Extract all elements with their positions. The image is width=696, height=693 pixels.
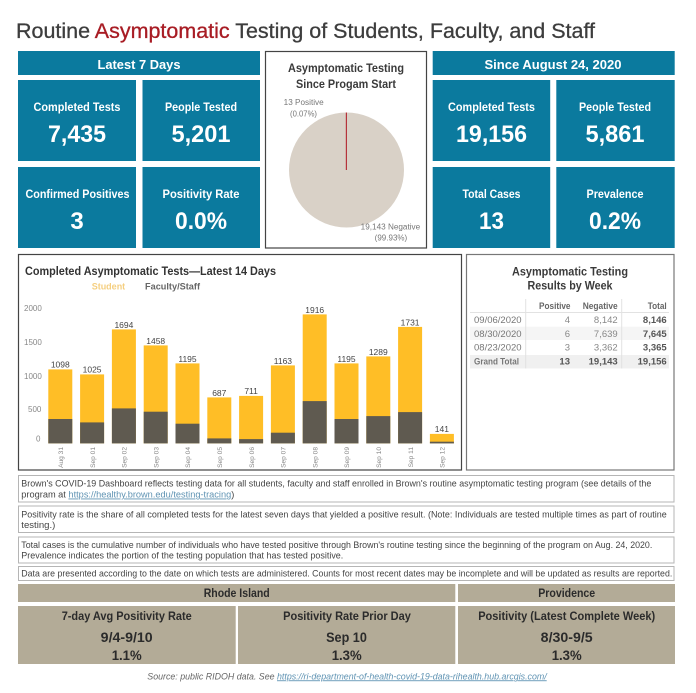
bar: Sep 07: 1163 xyxy=(274,356,292,366)
row: grand total: 19,143 xyxy=(589,356,618,367)
card: 7-day average positivity: 1.1% xyxy=(112,647,142,663)
label: positive: (0.07%) xyxy=(290,110,317,118)
legend: Student xyxy=(92,282,125,292)
label: negative: 19,143 Negative xyxy=(361,222,421,232)
bar: Sep 10: 1289 xyxy=(369,347,388,357)
bar: Aug 31: 1098 xyxy=(51,360,70,370)
bar: Sep 09: Sep 09 xyxy=(344,447,351,468)
y axis: 2000 xyxy=(24,304,42,313)
card: completed tests total: Completed Tests xyxy=(448,100,535,114)
bar: Sep 12 xyxy=(430,424,454,468)
bar: Sep 08 xyxy=(303,305,327,468)
bar: Sep 11: Sep 11 xyxy=(408,447,415,467)
card: prevalence: Prevalence xyxy=(586,187,644,201)
source line: Source: public RIDOH data. See https://ri-department-of-health-covid-19-data-rihealth.hub.arcgis.com/ xyxy=(147,671,548,681)
card: providence positivity: 1.3% xyxy=(552,647,582,663)
header: providence xyxy=(458,584,675,602)
note: total cases and prevalence: Prevalence indicates the portion of the testing population that has tested positive. xyxy=(21,550,343,560)
card: positivity rate prior day: 1.3% xyxy=(332,647,362,663)
bar: Sep 10 xyxy=(366,347,390,468)
bar: Sep 02 xyxy=(112,320,136,468)
bar: Sep 06 xyxy=(239,386,263,468)
bar: Sep 02: 1694 xyxy=(114,320,134,330)
card: people tested total: 5,861 xyxy=(586,121,644,148)
label: negative: (99.93%) xyxy=(375,234,408,242)
bar: Sep 12: 141 xyxy=(435,424,449,434)
note: dashboard description: Brown's COVID-19 Dashboard reflects testing data for all students, faculty and staff enrolled in Brown's routine asymptomatic testing program (see details of the xyxy=(21,479,651,489)
bar: Sep 04: 1195 xyxy=(178,354,197,364)
header: rhode island xyxy=(18,584,455,602)
table title xyxy=(512,266,628,292)
card: positivity rate xyxy=(142,167,260,248)
card: total cases: 13 xyxy=(479,208,504,235)
card: positivity rate prior day: Positivity Rate Prior Day xyxy=(283,611,411,623)
note: total cases and prevalence xyxy=(18,537,674,563)
row: 08/23/2020: 3 xyxy=(565,343,570,354)
chart title: Completed Asymptomatic Tests—Latest 14 Days xyxy=(25,266,276,278)
card: completed tests xyxy=(18,80,136,161)
card: prevalence: 0.2% xyxy=(589,208,641,235)
header: since august 24 xyxy=(433,51,675,75)
row: 09/06/2020 xyxy=(474,315,667,326)
y axis xyxy=(24,304,42,444)
card: positivity rate prior day: Sep 10 xyxy=(326,629,367,645)
bar: Sep 04: Sep 04 xyxy=(185,447,192,468)
row: 08/23/2020: 3,365 xyxy=(643,343,667,354)
legend: Faculty/Staff xyxy=(145,282,201,292)
bar: Sep 11 xyxy=(398,318,422,467)
row: 09/06/2020: 8,142 xyxy=(594,315,618,326)
y axis: 500 xyxy=(28,405,42,414)
bar: Aug 31 xyxy=(48,360,72,468)
bar: Sep 03: 1458 xyxy=(146,336,165,346)
note: dashboard description xyxy=(18,476,674,502)
card: positivity rate prior day xyxy=(238,606,455,664)
card: people tested: People Tested xyxy=(165,100,237,114)
card: completed tests: Completed Tests xyxy=(34,100,121,114)
label: positive: 13 Positive xyxy=(284,98,324,107)
row: 09/06/2020: 09/06/2020 xyxy=(474,315,522,326)
pie title: Since Progam Start xyxy=(296,79,396,91)
legend xyxy=(92,282,201,292)
panel: since august 24 xyxy=(433,51,675,248)
label: negative xyxy=(361,222,421,242)
card: providence positivity: 8/30-9/5 xyxy=(541,629,593,645)
note: dashboard description: program at https://healthy.brown.edu/testing-tracing ) xyxy=(21,490,234,500)
pie chart xyxy=(289,112,404,228)
bar: Sep 09: 1195 xyxy=(337,354,356,364)
card: confirmed positives xyxy=(18,167,136,248)
header: latest 7 days xyxy=(18,51,260,75)
bar: Sep 01: Sep 01 xyxy=(90,447,97,468)
bar: Sep 05: 687 xyxy=(212,388,227,398)
y axis: 1500 xyxy=(24,338,42,347)
card: completed tests: 7,435 xyxy=(48,121,106,148)
card: completed tests total: 19,156 xyxy=(456,121,527,148)
pie title xyxy=(288,63,404,91)
panel: pie chart since program start xyxy=(266,52,426,248)
card: prevalence xyxy=(556,167,675,248)
row: grand total xyxy=(474,356,667,367)
bar: Sep 09 xyxy=(334,354,358,468)
card: confirmed positives: Confirmed Positives xyxy=(26,187,130,201)
card: 7-day average positivity: 7-day Avg Positivity Rate xyxy=(62,611,192,623)
panel: results by week table xyxy=(466,254,674,470)
card: completed tests total xyxy=(433,80,550,161)
row: grand total: 13 xyxy=(559,356,570,367)
table header: Positive xyxy=(539,301,570,311)
table title: Asymptomatic Testing xyxy=(512,266,628,278)
table header: Negative xyxy=(583,301,618,311)
bar: Sep 04 xyxy=(176,354,200,468)
card: positivity rate: Positivity Rate xyxy=(162,187,240,201)
note: data dates: Data are presented according to the date on which tests are administered. Counts for most recent dates may be incomplete and will be updated as results are reported. xyxy=(21,568,672,578)
bar: Aug 31: Aug 31 xyxy=(58,447,65,468)
bar: Sep 02: Sep 02 xyxy=(122,447,129,468)
y axis: 1000 xyxy=(24,372,42,381)
row: 08/30/2020: 7,639 xyxy=(594,329,618,340)
row: 08/30/2020 xyxy=(474,329,667,340)
header: latest 7 days: Latest 7 Days xyxy=(98,57,180,72)
card: total cases: Total Cases xyxy=(462,187,521,201)
panel: bar chart xyxy=(18,254,462,470)
panel: latest 7 days xyxy=(18,51,260,248)
bar: Sep 06: 711 xyxy=(244,386,258,396)
row: 08/30/2020: 7,645 xyxy=(643,329,667,340)
note: positivity rate xyxy=(18,506,674,532)
label: positive xyxy=(284,98,324,118)
card: confirmed positives: 3 xyxy=(70,208,84,235)
bar: Sep 05 xyxy=(207,388,231,468)
row: 08/23/2020 xyxy=(474,343,667,354)
bars xyxy=(48,305,454,468)
bar: Sep 10: Sep 10 xyxy=(376,447,383,468)
bar: Sep 08: Sep 08 xyxy=(312,447,319,468)
card: people tested: 5,201 xyxy=(172,121,230,148)
card: people tested total: People Tested xyxy=(579,100,651,114)
pie title: Asymptomatic Testing xyxy=(288,63,404,75)
card: people tested total xyxy=(556,80,675,161)
note: total cases and prevalence: Total cases is the cumulative number of individuals who have tested positive through Brown's routine testing since the beginning of the program on Aug. 24, 2020. xyxy=(21,540,652,550)
row: 08/23/2020: 3,362 xyxy=(594,343,618,354)
row: 08/30/2020: 08/30/2020 xyxy=(474,329,522,340)
bar: Sep 03 xyxy=(144,336,168,468)
row: grand total: Grand Total xyxy=(474,356,519,367)
header: rhode island: Rhode Island xyxy=(204,588,270,600)
card: total cases xyxy=(433,167,550,248)
table title: Results by Week xyxy=(528,280,613,292)
card: people tested xyxy=(142,80,260,161)
card: providence positivity xyxy=(458,606,675,664)
bar: Sep 07: Sep 07 xyxy=(281,447,288,468)
header: since august 24: Since August 24, 2020 xyxy=(484,57,622,72)
bar: Sep 01: 1025 xyxy=(83,364,102,374)
bar: Sep 06: Sep 06 xyxy=(249,447,256,468)
table header xyxy=(539,301,667,311)
row: 09/06/2020: 4 xyxy=(565,315,570,326)
card: 7-day average positivity: 9/4-9/10 xyxy=(101,629,153,645)
row: 09/06/2020: 8,146 xyxy=(643,315,667,326)
note: positivity rate: Positivity rate is the share of all completed tests for the latest seven days that yielded a positive result. (Note: Individuals are tested multiple times as part of routine xyxy=(21,509,667,519)
card: positivity rate: 0.0% xyxy=(175,208,227,235)
table header: Total xyxy=(648,301,667,311)
y axis: 0 xyxy=(36,434,41,444)
bar: Sep 07 xyxy=(271,356,295,468)
bar: Sep 01 xyxy=(80,364,104,468)
bar: Sep 05: Sep 05 xyxy=(217,447,224,468)
header: providence: Providence xyxy=(538,588,595,600)
bar: Sep 08: 1916 xyxy=(305,305,324,315)
row: 08/23/2020: 08/23/2020 xyxy=(474,343,522,354)
bar: Sep 11: 1731 xyxy=(401,318,420,328)
bar: Sep 12: Sep 12 xyxy=(440,447,447,468)
row: 08/30/2020: 6 xyxy=(565,329,570,340)
note: positivity rate: testing.) xyxy=(21,520,55,530)
bar: Sep 03: Sep 03 xyxy=(153,447,160,468)
card: providence positivity: Positivity (Latest Complete Week) xyxy=(478,611,655,623)
title: Routine Asymptomatic Testing of Students, Faculty, and Staff xyxy=(16,20,595,43)
card: 7-day average positivity xyxy=(18,606,236,664)
row: grand total: 19,156 xyxy=(638,356,667,367)
